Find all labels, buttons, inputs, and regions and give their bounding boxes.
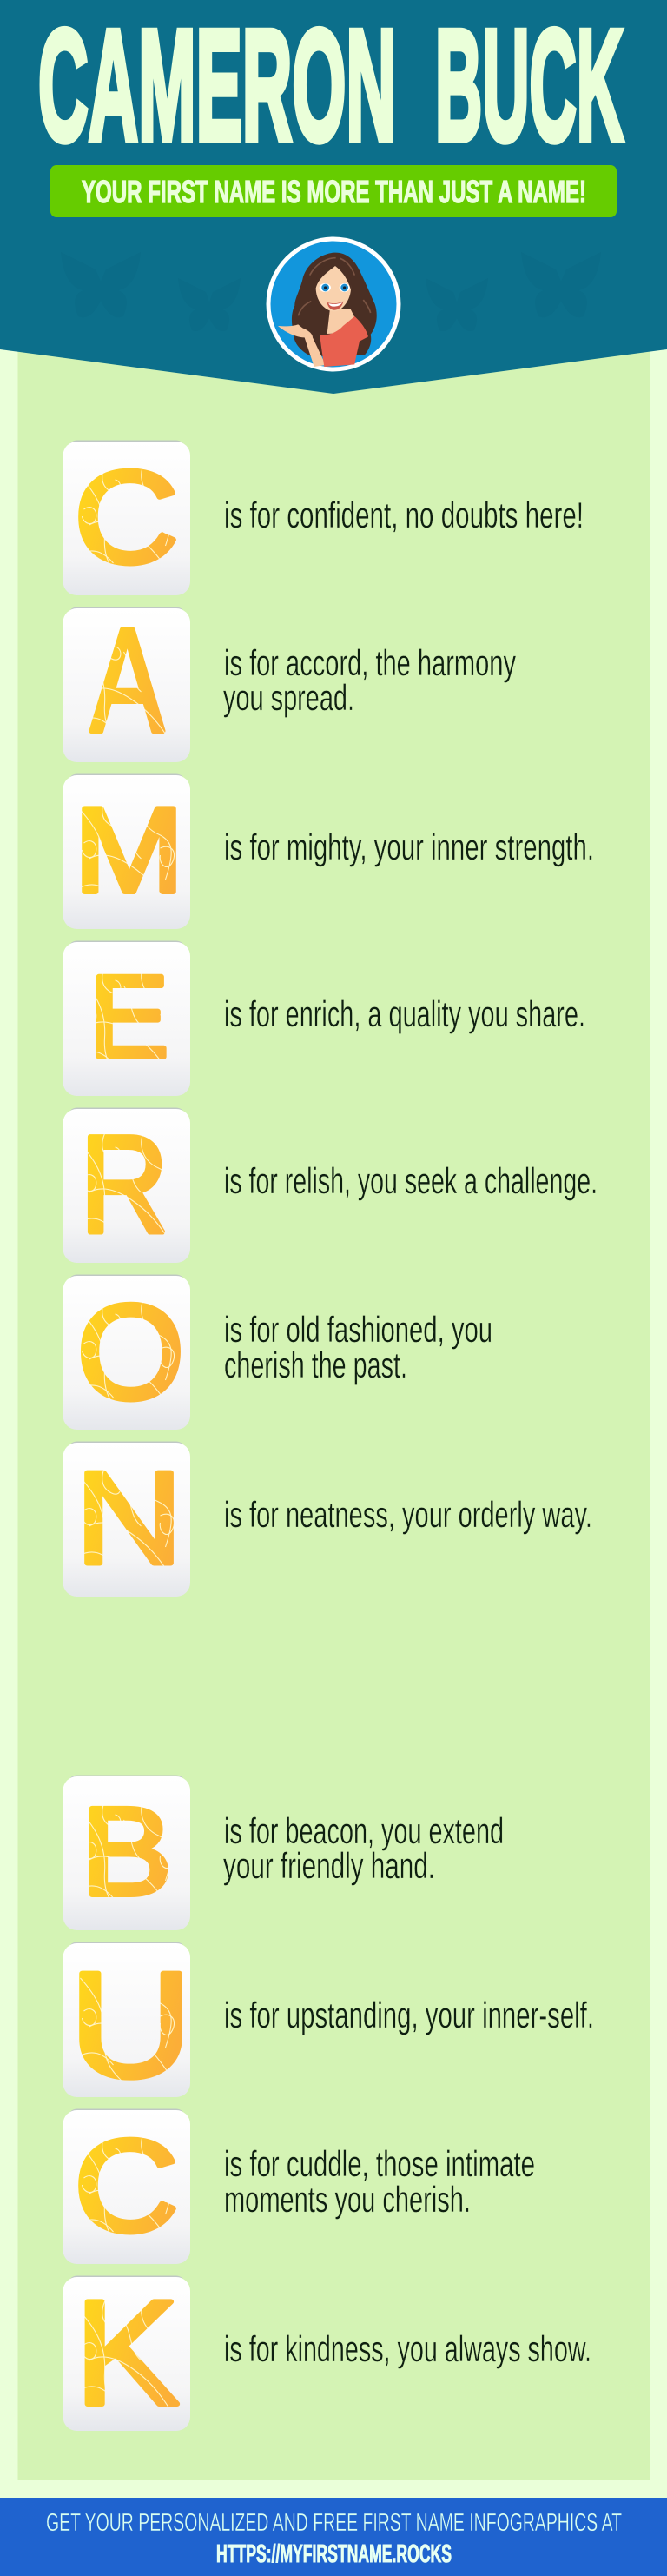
letter tile: U — [69, 1942, 193, 2108]
text — [224, 1309, 492, 1385]
text: your friendly hand. — [223, 1845, 435, 1886]
text: cherish the past. — [224, 1344, 407, 1385]
row: A — [63, 598, 516, 762]
letter tile — [63, 773, 190, 929]
arm and hand — [278, 324, 326, 367]
letter tile: C — [74, 2112, 179, 2259]
footer — [0, 2498, 667, 2576]
subtitle bar — [50, 165, 617, 217]
text: you spread. — [223, 677, 354, 718]
row: R — [63, 1107, 598, 1263]
row: O — [63, 1274, 492, 1430]
text: is for cuddle, those intimate — [224, 2143, 535, 2184]
row: M — [63, 773, 594, 929]
mouth — [327, 302, 343, 310]
text — [224, 2143, 535, 2220]
header banner — [0, 0, 667, 394]
row: C — [63, 440, 584, 595]
letter tile: B — [81, 1782, 173, 1922]
row: U — [63, 1942, 594, 2108]
panel: letters background — [17, 330, 650, 2480]
text — [223, 642, 516, 718]
eyes — [320, 283, 331, 292]
shirt — [320, 316, 368, 367]
letter tile — [63, 1775, 190, 1930]
row: C second — [63, 2108, 535, 2264]
letter tile: K — [75, 2270, 179, 2436]
neck — [327, 309, 354, 334]
letter tile: O — [76, 1277, 184, 1427]
row: B — [63, 1775, 504, 1930]
footer url: HTTPS://MYFIRSTNAME.ROCKS — [216, 2540, 452, 2568]
text: is for accord, the harmony — [224, 642, 516, 683]
row: N — [63, 1441, 592, 1597]
letter tile — [63, 940, 190, 1096]
text: is for beacon, you extend — [224, 1810, 504, 1851]
text: is for old fashioned, you — [224, 1309, 492, 1350]
face — [316, 266, 351, 311]
letter tile: R — [80, 1107, 168, 1262]
hair — [292, 253, 377, 356]
text — [223, 1810, 504, 1886]
text: moments you cherish. — [224, 2179, 471, 2220]
letter tile: C — [74, 443, 179, 590]
letter tile: E — [89, 953, 168, 1082]
letter tile: A — [90, 598, 164, 762]
row: K — [63, 2270, 591, 2436]
row: E — [63, 940, 585, 1096]
letter tile: M — [74, 783, 184, 918]
letter tile: N — [75, 1444, 182, 1590]
icon: woman avatar in circle — [268, 239, 399, 369]
